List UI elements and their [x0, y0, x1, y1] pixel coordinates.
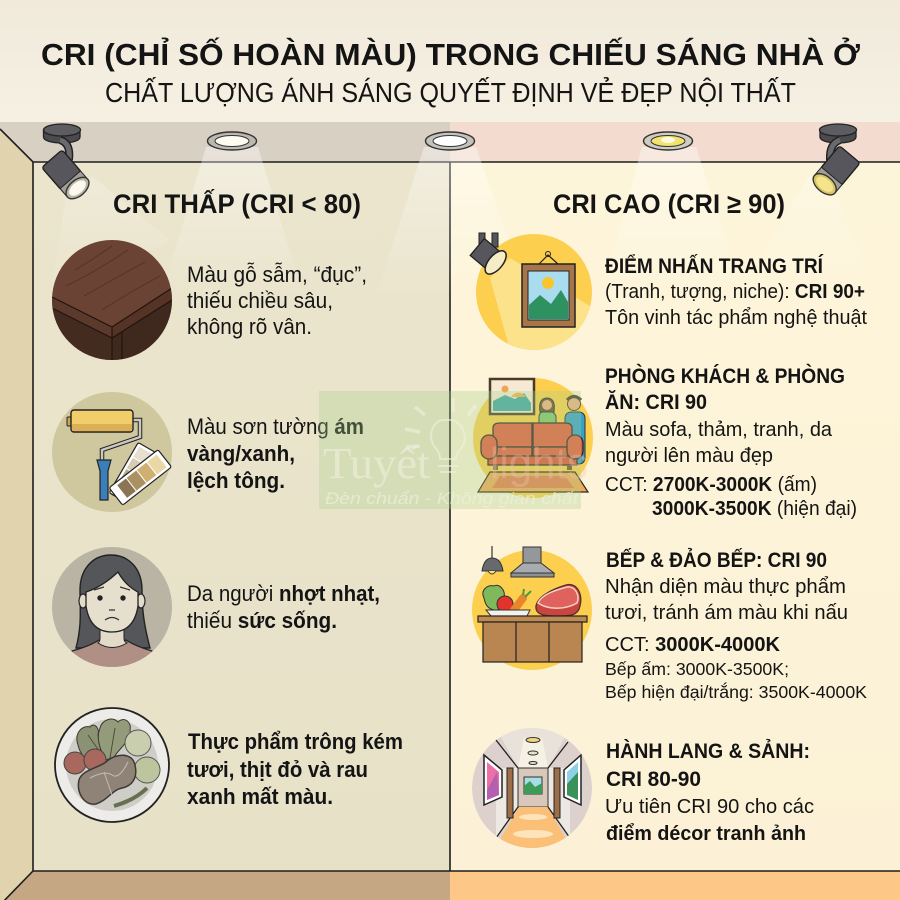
panel: low CRI — [52, 188, 403, 822]
text: skin: Da người nhợt nhạt, — [187, 581, 380, 606]
header background — [0, 0, 900, 122]
heading: high CRI: CRI CAO (CRI ≥ 90) — [553, 189, 785, 219]
text: wood: Màu gỗ sẫm, “đục”, — [187, 262, 367, 287]
panel: high CRI — [319, 189, 867, 850]
icon: dark wood table — [52, 240, 172, 360]
icon: pale sad woman — [52, 547, 172, 672]
text: living room: CCT: 2700K-3000K (ấm) — [605, 474, 817, 496]
text: living room: Màu sofa, thảm, tranh, da — [605, 418, 833, 441]
text: kitchen: CCT: 3000K-4000K — [605, 633, 780, 656]
icon: accent light on picture — [468, 233, 600, 350]
text: living room: PHÒNG KHÁCH & PHÒNG — [605, 364, 845, 388]
text: paint: Màu sơn tường ám — [187, 414, 364, 439]
text: kitchen: Nhận diện màu thực phẩm — [605, 575, 846, 598]
text: skin — [187, 581, 380, 633]
icon: right spotlight — [809, 124, 860, 199]
icon: kitchen island — [472, 546, 592, 670]
watermark: Đèn chuẩn - Không gian chất — [325, 489, 579, 508]
text: hallway: Ưu tiên CRI 90 cho các — [605, 795, 814, 818]
icon: left spotlight — [42, 124, 93, 203]
heading: low CRI: CRI THẤP (CRI < 80) — [113, 188, 361, 219]
text: food: Thực phẩm trông kém — [188, 729, 403, 754]
title: CRI (CHỈ SỐ HOÀN MÀU) TRONG CHIẾU SÁNG NHÀ Ở — [41, 36, 861, 72]
text: accent: (Tranh, tượng, niche): CRI 90+ — [605, 281, 865, 303]
text: food: xanh mất màu. — [187, 784, 333, 809]
text: paint: lệch tông. — [187, 468, 285, 493]
text: wood: thiếu chiều sâu, — [187, 288, 333, 313]
text: kitchen: Bếp ấm: 3000K-3500K; — [605, 659, 789, 679]
text: accent: Tôn vinh tác phẩm nghệ thuật — [605, 307, 867, 329]
text: paint: vàng/xanh, — [187, 441, 295, 466]
text: living room: người lên màu đẹp — [605, 444, 773, 467]
watermark: lights — [490, 439, 588, 488]
text: paint — [187, 414, 364, 493]
icon: paint roller and swatches — [52, 392, 172, 512]
text: kitchen: Bếp hiện đại/trắng: 3500K-4000K — [605, 681, 867, 702]
text: living room — [605, 364, 857, 520]
text: accent: ĐIỂM NHẤN TRANG TRÍ — [605, 255, 824, 278]
icon: hallway — [472, 728, 592, 850]
watermark: Tuyết — [323, 439, 430, 488]
icon: plate of dull food — [55, 708, 169, 822]
watermark — [319, 391, 588, 509]
subtitle: CHẤT LƯỢNG ÁNH SÁNG QUYẾT ĐỊNH VẺ ĐẸP NỘI THẤT — [105, 76, 796, 108]
text: food: tươi, thịt đỏ và rau — [187, 757, 368, 782]
icon: downlight 2 — [426, 132, 474, 150]
light beams — [50, 147, 880, 300]
text: hallway: CRI 80-90 — [606, 768, 701, 791]
text: living room: ĂN: CRI 90 — [605, 391, 707, 414]
text: kitchen: BẾP & ĐẢO BẾP: CRI 90 — [606, 549, 827, 572]
icon: downlight 1 — [208, 132, 256, 150]
text: kitchen: tươi, tránh ám màu khi nấu — [605, 601, 848, 624]
text: living room: 3000K-3500K (hiện đại) — [652, 498, 857, 520]
text: kitchen — [605, 549, 867, 702]
icon: downlight 3 warm — [644, 132, 692, 150]
text: wood — [187, 262, 367, 339]
text: hallway: HÀNH LANG & SẢNH: — [606, 740, 810, 763]
text: wood: không rõ vân. — [187, 314, 312, 339]
text: accent — [605, 255, 867, 329]
text: skin: thiếu sức sống. — [187, 608, 337, 633]
text: food — [187, 729, 403, 809]
text: hallway — [605, 740, 814, 845]
text: hallway: điểm décor tranh ảnh — [606, 822, 806, 845]
icon: living room sofa — [473, 378, 593, 498]
